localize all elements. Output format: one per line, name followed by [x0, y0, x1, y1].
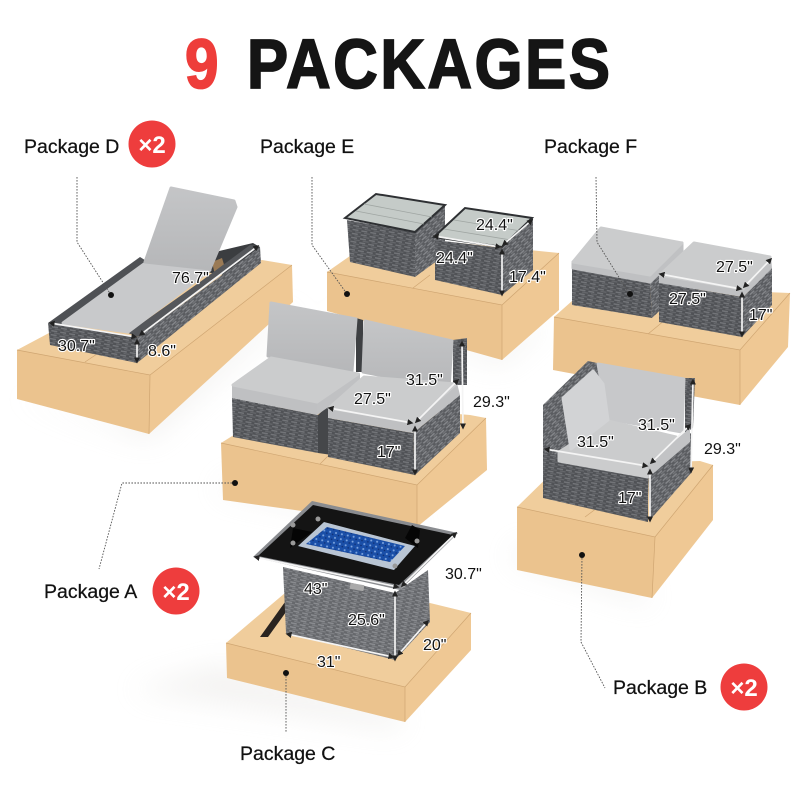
dimensions A: 17"	[377, 444, 400, 461]
dimensions C: 25.6"	[348, 612, 385, 629]
dimensions C: 31"	[317, 654, 340, 671]
title: 9	[185, 25, 218, 103]
dimensions A: 31.5"	[406, 372, 443, 389]
label: Package D: Package D	[24, 136, 119, 158]
dimensions D: 8.6"	[148, 343, 176, 360]
dimensions E	[436, 217, 546, 286]
title: PACKAGES	[247, 24, 613, 103]
dimensions D: 30.7"	[58, 338, 95, 355]
package A: box and armless sofas	[221, 303, 487, 527]
label: Package B: Package B	[613, 677, 707, 699]
dimensions B: 31.5"	[577, 434, 614, 451]
dimensions B: 17"	[618, 490, 641, 507]
label: Package F: Package F	[544, 136, 637, 158]
dimensions C: 43"	[304, 581, 327, 598]
leader A	[99, 480, 238, 569]
badge A x2	[152, 568, 200, 614]
side table E back	[345, 194, 445, 277]
dimensions E: 24.4"	[436, 250, 473, 267]
badge B x2	[720, 664, 768, 710]
dimensions B: 29.3"	[704, 441, 741, 458]
leader D	[77, 177, 114, 298]
badge A x2: ×2	[162, 579, 190, 606]
dimensions F: 17"	[749, 307, 772, 324]
sofa A right	[328, 321, 467, 475]
corner sofa B	[543, 361, 695, 522]
fire pit table	[253, 501, 458, 660]
dimensions E: 17.4"	[509, 269, 546, 286]
box F	[553, 285, 790, 405]
dimensions F: 27.5"	[716, 259, 753, 276]
leader B	[579, 552, 605, 688]
package C: box and fire pit table	[226, 501, 471, 722]
ottoman F front	[659, 243, 772, 337]
package D: box and chaise lounge	[17, 188, 293, 434]
dimensions C: 30.7"	[445, 566, 482, 583]
package F: box and ottomans	[553, 228, 790, 405]
dimensions F: 27.5"	[669, 291, 706, 308]
leader C	[283, 670, 289, 733]
badge B x2: ×2	[730, 675, 758, 702]
dimensions B	[577, 417, 741, 507]
leader E	[312, 177, 350, 297]
dimensions E: 24.4"	[476, 217, 513, 234]
box B	[517, 461, 713, 598]
label: Package E: Package E	[260, 136, 354, 158]
dimensions C: 20"	[423, 637, 446, 654]
package B: box and corner sofa	[517, 361, 713, 598]
ottoman F back	[572, 228, 682, 318]
dimensions C	[304, 566, 482, 671]
dimensions A: 29.3"	[473, 394, 510, 411]
chaise lounge D	[48, 188, 261, 363]
dimensions B: 31.5"	[638, 417, 675, 434]
dimensions A: 27.5"	[354, 391, 391, 408]
dimensions D	[58, 270, 209, 360]
package E: box and side tables	[327, 194, 559, 360]
dimensions D: 76.7"	[172, 270, 209, 287]
floor shadows	[10, 305, 650, 730]
box D	[17, 260, 293, 434]
box C	[226, 593, 471, 722]
badge D x2	[128, 120, 176, 168]
dimensions F	[669, 259, 772, 324]
leader F	[596, 177, 633, 297]
label: Package C: Package C	[240, 743, 335, 765]
box A	[221, 400, 487, 527]
side table E front	[434, 208, 533, 295]
box E	[327, 235, 559, 360]
badge D x2: ×2	[138, 132, 166, 159]
dimensions A	[354, 372, 510, 461]
label: Package A: Package A	[44, 581, 137, 603]
sofa A left	[232, 303, 363, 455]
